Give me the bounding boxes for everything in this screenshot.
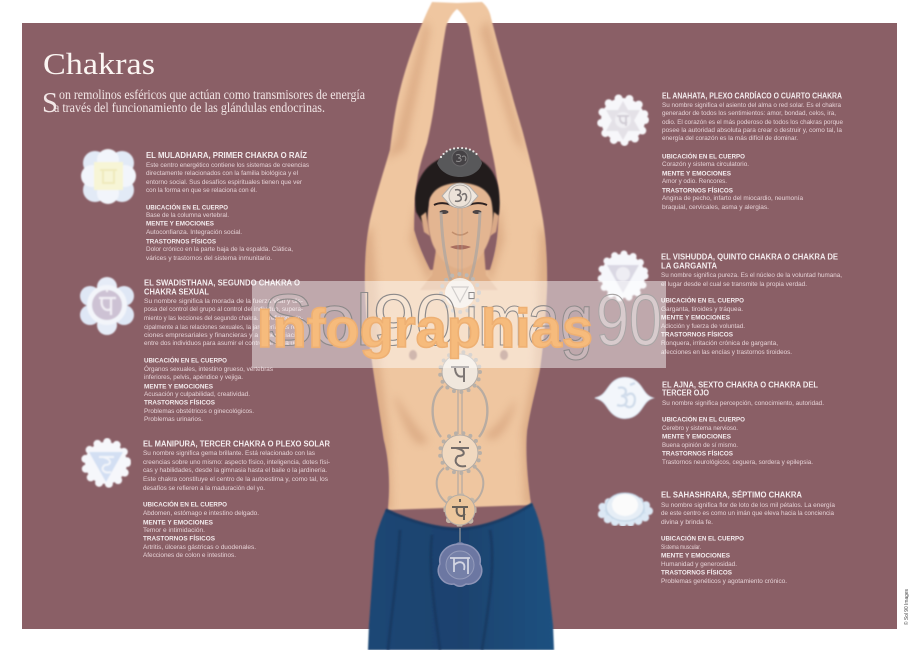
text: sahasrara: Problemas genéticos y agotamiento crónico. (661, 578, 787, 585)
text: ajna: TRASTORNOS FÍSICOS (662, 448, 734, 458)
text: anahata: Angina de pecho, infarto del miocardio, neumonía (662, 195, 804, 202)
text: swadhisthana: CHAKRA SEXUAL (144, 288, 209, 296)
text: muladhara: TRASTORNOS FÍSICOS (146, 236, 217, 246)
ears (421, 212, 499, 236)
text: vishuddha (661, 252, 842, 356)
text: vishuddha: afecciones en las encías y trastornos tiroideos. (661, 349, 792, 356)
text: anahata (662, 92, 844, 211)
intro drop cap: S (42, 88, 58, 119)
text: swadhisthana: Su nombre significa la morada de la fuerza vital y dis- (144, 298, 303, 305)
text: swadhisthana: Problemas urinarios. (144, 416, 203, 423)
trouser folds (386, 504, 532, 650)
text: muladhara: entorno social. Sus desafíos espirituales tienen que ver (146, 179, 302, 186)
text: muladhara: MENTE Y EMOCIONES (146, 220, 215, 228)
text: vishuddha: Adicción y fuerza de voluntad. (661, 323, 745, 330)
text: manipura: MENTE Y EMOCIONES (143, 520, 214, 526)
text: swadhisthana: Órganos sexuales, intestino grueso, vértebras (144, 366, 273, 373)
text: muladhara (146, 151, 309, 262)
text: swadhisthana: entre dos individuos para asumir el control de cada uno. (144, 340, 303, 347)
logo part: Sol90: Sol90 (262, 281, 458, 361)
icon: anahata (601, 98, 645, 142)
text: ajna: EL AJNA, SEXTO CHAKRA O CHAKRA DEL (662, 380, 818, 390)
text: manipura (143, 440, 330, 559)
text: ajna: Trastornos neurológicos, ceguera, sordera y epilepsia. (662, 459, 813, 466)
text: manipura: desafíos se refieren a la maduración del yo. (143, 485, 265, 492)
text: sahasrara: EL SAHASHRARA, SÉPTIMO CHAKRA (661, 490, 802, 500)
logo part: 90: 90 (596, 281, 662, 361)
text: vishuddha: UBICACIÓN EN EL CUERPO (661, 296, 744, 304)
text: swadhisthana: UBICACIÓN EN EL CUERPO (144, 356, 227, 364)
body chakra: root (438, 542, 482, 586)
text: anahata: Corazón y sistema circulatorio. (662, 161, 749, 168)
text: vishuddha: EL VISHUDDA, QUINTO CHAKRA O CHAKRA DE (661, 252, 839, 262)
text: anahata: energía del corazón es la más difícil de dominar. (662, 135, 798, 142)
text: anahata: odio. El corazón es el más poderoso de todos los chakras porque (662, 119, 844, 126)
text: sahasrara: TRASTORNOS FÍSICOS (661, 568, 733, 576)
text: anahata: MENTE Y EMOCIONES (662, 170, 732, 178)
text: vishuddha: TRASTORNOS FÍSICOS (661, 330, 734, 338)
text: manipura: UBICACIÓN EN EL CUERPO (143, 500, 227, 508)
body chakra: third eye (442, 183, 478, 208)
text: muladhara: Autoconfianza. Integración social. (146, 229, 242, 236)
text: sahasrara: UBICACIÓN EN EL CUERPO (661, 534, 744, 542)
text: ajna: Su nombre significa percepción, conocimiento, autoridad. (662, 400, 824, 407)
icon: manipura (85, 442, 127, 484)
text: muladhara: Este centro energético contiene los sistemas de creencias (146, 162, 309, 169)
text: muladhara: UBICACIÓN EN EL CUERPO (146, 202, 228, 212)
text: anahata: posee la autoridad absoluta para crear o destruir y, como tal, la (662, 127, 843, 134)
text: manipura: TRASTORNOS FÍSICOS (143, 534, 216, 542)
text: anahata: UBICACIÓN EN EL CUERPO (662, 152, 745, 160)
text: swadhisthana: MENTE Y EMOCIONES (144, 384, 214, 390)
text: vishuddha: Ronquera, irritación crónica de garganta, (661, 340, 778, 347)
facial features (434, 203, 487, 250)
watermark: outlined logo (262, 281, 662, 361)
text: swadhisthana: Acusación y culpabilidad, creatividad. (144, 391, 250, 398)
text: muladhara: directamente relacionados con la familia biológica y el (146, 170, 298, 177)
text: muladhara: várices y trastornos del sistema inmunitario. (146, 255, 272, 262)
text: sahasrara: MENTE Y EMOCIONES (661, 552, 731, 560)
text: swadhisthana: cipalmente a las relaciones sexuales, la jardinería, las rela- (144, 324, 303, 331)
text: ajna: Buena opinión de sí mismo. (662, 442, 738, 449)
text: sahasrara (661, 490, 836, 585)
text: vishuddha: MENTE Y EMOCIONES (661, 314, 731, 322)
hair (415, 155, 500, 228)
intro line 2: a través del funcionamiento de las glándulas endocrinas. (54, 100, 325, 115)
text: ajna: UBICACIÓN EN EL CUERPO (662, 414, 745, 424)
nipples (409, 350, 508, 360)
text: anahata: braquial, cervicales, asma y alergias. (662, 204, 769, 211)
icon: sahasrara (601, 493, 649, 523)
text: sahasrara: Su nombre significa flor de loto de los mil pétalos. La energía (661, 502, 836, 509)
text: manipura: Temor e intimidación. (143, 527, 205, 534)
body chakra: heart (440, 352, 480, 392)
logo part: imag: imag (465, 281, 593, 361)
watermark: orange wordmark: Infographias (257, 297, 593, 359)
text: manipura: cas y habilidades, desde la gimnasia hasta el baile o la jardinería. (143, 467, 327, 474)
credit: © Sol 90 Images (903, 589, 910, 625)
body chakra: throat (441, 274, 479, 312)
neck (420, 250, 498, 290)
text: muladhara: con la forma en que se relaciona con él. (146, 187, 257, 194)
text: vishuddha: Su nombre significa pureza. Es el núcleo de la voluntad humana, (661, 272, 842, 279)
text: manipura: creencias sobre uno mismo: aspecto físico, inteligencia, dotes físi- (143, 459, 330, 466)
text: anahata: Su nombre significa el asiento del alma o red solar. Es el chakra (662, 102, 842, 109)
figure: man with raised arms (360, 2, 554, 650)
text: ajna: MENTE Y EMOCIONES (662, 434, 732, 440)
text: sahasrara: Sistema muscular. (661, 544, 701, 551)
text: ajna: Cerebro y sistema nervioso. (662, 425, 738, 432)
text: vishuddha: Garganta, tiroides y tráquea. (661, 306, 743, 313)
text: swadhisthana: inferiores, pelvis, apéndice y vejiga. (144, 374, 243, 381)
icon: ajna (595, 378, 653, 418)
body chakra: sacral (445, 495, 475, 525)
text: swadhisthana: posa del control del grupo al control del individuo, supera- (144, 306, 303, 313)
text: swadhisthana (144, 278, 304, 423)
text: vishuddha: LA GARGANTA (661, 262, 717, 270)
text: manipura: Este chakra constituye el centro de la autoestima y, como tal, los (143, 476, 328, 483)
text: anahata: Amor y odio. Rencores. (662, 178, 727, 185)
text: swadhisthana: ciones empresariales y financieras y a la negociación (144, 332, 304, 339)
text: manipura: Su nombre significa gema brillante. Está relacionado con las (143, 450, 315, 457)
text: swadhisthana: EL SWADISTHANA, SEGUNDO CHAKRA O (144, 278, 300, 288)
text: muladhara: EL MULADHARA, PRIMER CHAKRA O RAÍZ (146, 151, 307, 160)
text: muladhara: Dolor crónico en la parte baja de la espalda. Ciática, (146, 246, 293, 253)
text: manipura: Abdomen, estómago e intestino delgado. (143, 510, 259, 517)
trousers (368, 503, 554, 650)
text: vishuddha: el lugar desde el cual se transmite la propia verdad. (661, 281, 807, 288)
text: ajna (662, 380, 824, 466)
text: swadhisthana: miento y las lecciones del segundo chakra. Se refieren prin- (144, 315, 303, 322)
text: manipura: EL MANIPURA, TERCER CHAKRA O PLEXO SOLAR (143, 440, 330, 448)
text: swadhisthana: TRASTORNOS FÍSICOS (144, 398, 216, 406)
icon: vishuddha (601, 254, 645, 298)
text: sahasrara: divina y brinda fe. (661, 519, 713, 526)
text: manipura: Afecciones de colon e intestinos. (143, 552, 236, 559)
title: Chakras (43, 46, 155, 81)
text: anahata: TRASTORNOS FÍSICOS (662, 186, 734, 194)
icon: muladhara (81, 149, 136, 204)
intro line 1: on remolinos esféricos que actúan como transmisores de energía (59, 87, 365, 102)
text: ajna: TERCER OJO (662, 388, 709, 398)
text: manipura: Artritis, úlceras gástricas o duodenales. (143, 544, 256, 551)
text: sahasrara: de este centro es como un imán que eleva hacia la conciencia (661, 510, 835, 517)
intro text (42, 87, 365, 119)
body chakra: solar plexus (440, 433, 480, 473)
text: swadhisthana: Problemas obstétricos o ginecológicos. (144, 408, 254, 415)
icon: swadhisthana (80, 277, 134, 335)
body chakra: crown (437, 148, 482, 177)
face (428, 183, 493, 269)
text: muladhara: Base de la columna vertebral. (146, 212, 229, 219)
watermark band (252, 281, 666, 368)
text: sahasrara: Humanidad y generosidad. (661, 561, 737, 568)
body shading (360, 20, 552, 510)
body silhouette (365, 2, 547, 510)
text: anahata: EL ANAHATA, PLEXO CARDÍACO O CUARTO CHAKRA (662, 92, 842, 100)
text: anahata: generador de todos los sentimientos: amor, bondad, celos, ira, (662, 110, 836, 117)
chakra channels along the spine (433, 208, 487, 548)
